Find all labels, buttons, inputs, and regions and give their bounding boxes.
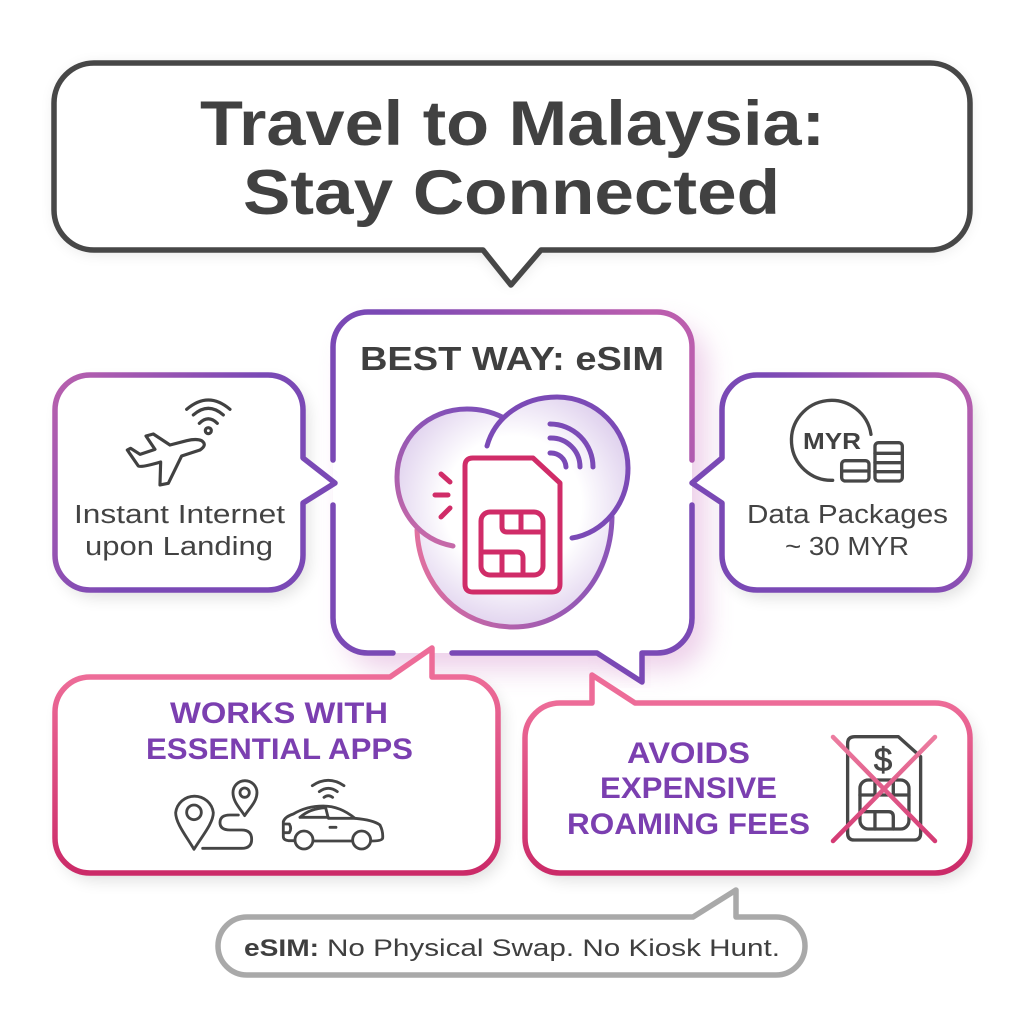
icon: plane with wifi <box>127 400 230 485</box>
title line 2: Stay Connected <box>243 158 780 228</box>
icon: crossed out sim with dollar: $ <box>874 741 892 778</box>
icon: MYR coin with stacks <box>791 400 902 481</box>
right circle arc <box>487 397 628 538</box>
text: avoids: AVOIDS <box>627 737 750 770</box>
text: MYR: MYR <box>803 428 861 454</box>
text: footer: No Physical Swap. No Kiosk Hunt. <box>327 935 780 962</box>
panel: title speech bubble <box>54 63 970 285</box>
text: upon landing: upon Landing <box>85 533 273 561</box>
center panel glow <box>345 325 707 682</box>
icon: esim with signal clouds <box>397 397 628 627</box>
sparks <box>435 474 450 517</box>
panel: avoids roaming fees <box>525 675 975 880</box>
panel: essential apps <box>55 648 503 880</box>
sim card <box>465 458 560 592</box>
icon: map route pins <box>176 781 257 849</box>
panel: center fill <box>333 312 692 682</box>
cloud fills <box>397 397 628 627</box>
panel: instant internet <box>55 375 335 597</box>
text: price: ~ 30 MYR <box>785 533 909 561</box>
text: works with: WORKS WITH <box>170 697 388 730</box>
text: essential apps: ESSENTIAL APPS <box>146 733 413 766</box>
signal waves <box>550 424 593 467</box>
icon: crossed out sim with dollar <box>833 737 935 841</box>
title line 1: Travel to Malaysia: <box>200 89 825 159</box>
panel: footer pill <box>218 890 805 975</box>
text: roaming fees: ROAMING FEES <box>567 808 810 841</box>
left circle arc <box>397 409 502 546</box>
text: instant internet: Instant Internet <box>74 501 285 529</box>
text: data packages: Data Packages <box>747 501 948 529</box>
text: best way heading: BEST WAY: eSIM <box>360 340 664 377</box>
text: footer: eSIM: <box>244 935 319 962</box>
panel: data packages <box>692 375 975 597</box>
bottom circle arc <box>417 517 612 627</box>
text: expensive: EXPENSIVE <box>600 772 777 805</box>
icon: connected car <box>283 780 383 849</box>
panel: center strokes <box>333 312 692 682</box>
